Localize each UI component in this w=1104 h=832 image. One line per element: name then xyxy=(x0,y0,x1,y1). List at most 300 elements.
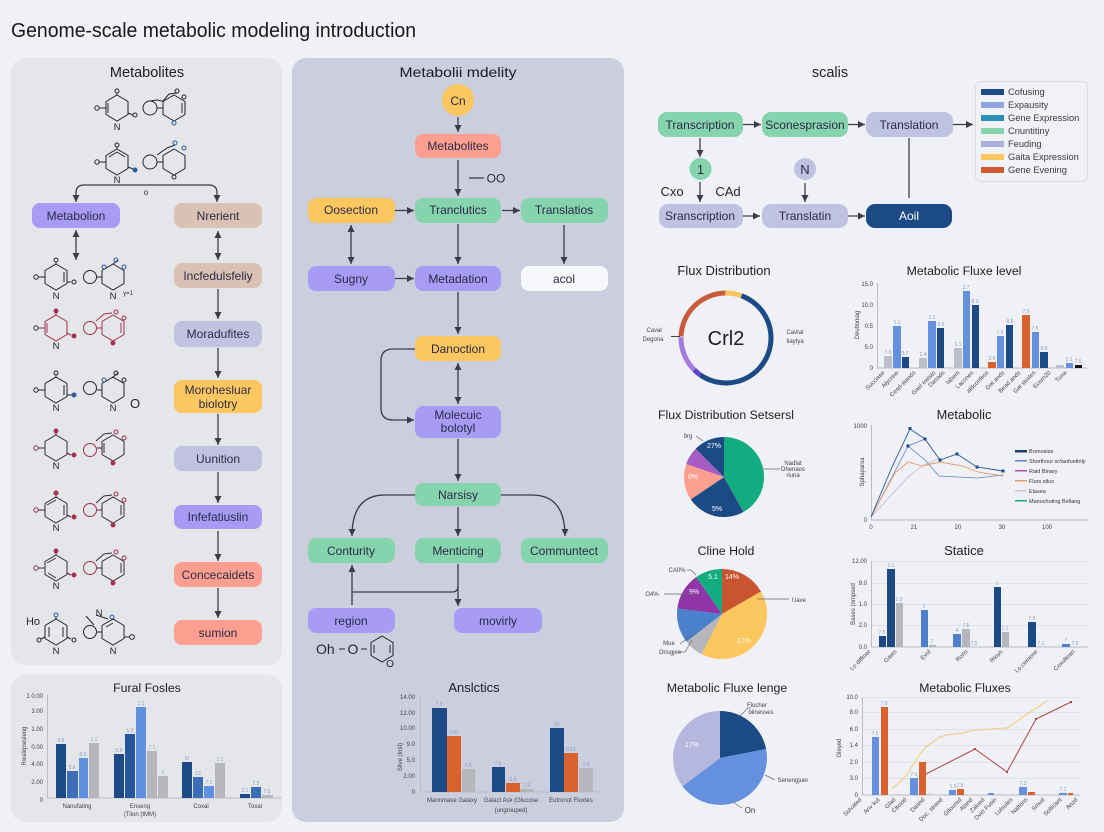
node: Translatin: Translatin xyxy=(779,209,831,223)
node: Conturity: Conturity xyxy=(327,544,375,558)
arrow xyxy=(699,182,701,202)
node: region: region xyxy=(334,614,368,628)
bar chart: analytics: Mannmase Galaxy xyxy=(427,798,477,804)
bar chart: statice: 1.0 xyxy=(859,602,868,608)
bar chart: 3.00 xyxy=(31,709,44,715)
arrow xyxy=(217,472,219,503)
bar chart: analytics: 9.0 xyxy=(407,742,416,748)
bar chart: 1.1 xyxy=(138,701,145,707)
bar chart: statice: 1.1 xyxy=(888,563,895,569)
bar chart: analytics: 0.9 xyxy=(510,777,517,783)
line chart: metabolic: 0 xyxy=(869,525,873,531)
combo chart: metabolic fluxes: Solvated xyxy=(843,797,863,818)
node: Oosection: Oosection xyxy=(324,203,378,217)
arrow xyxy=(457,160,459,196)
bar chart: metabolic fluxe level: 1.1 xyxy=(894,320,901,326)
bar chart: analytics: 7.3 xyxy=(436,702,443,708)
combo chart: metabolic fluxes: Cltoxid xyxy=(891,797,908,814)
heading: analytics chart: Anslctics xyxy=(448,680,500,695)
molecule row 5: N xyxy=(110,403,117,414)
bar chart: statice: 2.0 xyxy=(859,623,868,629)
bar chart: 5.5 xyxy=(116,748,123,754)
node: Morohesluar biolotry xyxy=(174,380,262,413)
node: Cn: Cn xyxy=(450,94,466,108)
connector xyxy=(908,138,910,198)
bar chart: metabolic fluxe level: aldconfess xyxy=(966,370,990,395)
pie chart: flux distribution setsersl: 0% xyxy=(688,474,698,481)
molecule row 3: y=1 xyxy=(123,291,134,297)
bar chart: metabolic fluxe level: 1.4 xyxy=(920,352,927,358)
combo chart: metabolic fluxes: Smud xyxy=(1031,797,1046,813)
bar chart: metabolic fluxe level: 7.5 xyxy=(997,330,1004,336)
combo chart: metabolic fluxes: 0 xyxy=(855,793,859,799)
bar chart: metabolic fluxe level: Bead ands xyxy=(998,370,1022,395)
arrow xyxy=(457,439,459,481)
molecule row 7: N xyxy=(53,523,60,534)
pie chart: flux distribution setsersl: 5% xyxy=(712,506,722,513)
bar chart: analytics: 51 xyxy=(554,722,560,728)
line chart: metabolic: Elasea xyxy=(1029,489,1047,495)
bar chart: metabolic fluxe level: 5.0 xyxy=(865,345,874,351)
bar chart: 4.00 xyxy=(31,762,44,768)
bar chart: analytics: 7.3 xyxy=(524,783,531,789)
bar chart: analytics: 7.3 xyxy=(583,762,590,768)
arrow xyxy=(395,210,414,212)
bar chart: metabolic fluxe level: 7.6 xyxy=(1075,359,1082,365)
combo chart: metabolic fluxes: Atand xyxy=(959,797,974,813)
arrow xyxy=(350,225,352,264)
node: Uunition xyxy=(174,446,262,471)
node: Morohesluar biolotry: Morohesluar xyxy=(185,383,251,397)
node: acol xyxy=(521,266,608,291)
line chart: metabolic: 21 xyxy=(911,525,918,531)
node: Concecaidets: Concecaidets xyxy=(182,568,254,582)
molecule row 4: N xyxy=(53,341,60,352)
line chart: metabolic: 1000 xyxy=(854,424,868,430)
legend: Cofusing xyxy=(1008,87,1045,97)
combo chart: metabolic fluxes: 7.6 xyxy=(881,701,888,707)
arrow xyxy=(457,224,459,264)
node: Narsisy: Narsisy xyxy=(438,488,478,502)
bar chart: analytics: 14.00 xyxy=(400,695,416,701)
legend xyxy=(976,82,1088,182)
node: Communtect xyxy=(521,538,608,563)
arrow xyxy=(217,531,219,561)
bar chart: statice: 1.9 xyxy=(896,597,903,603)
bar chart: metabolic fluxe level: 1.1 xyxy=(955,342,962,348)
bar chart: 5.5 xyxy=(80,752,87,758)
bar chart: metabolic fluxe level: Gat studes xyxy=(1013,370,1037,395)
node: movirly xyxy=(454,608,542,633)
bar chart: metabolic fluxe level: 3.1 xyxy=(1066,357,1073,363)
connector label: o xyxy=(144,188,149,197)
bar chart: 0 xyxy=(40,798,44,804)
bar chart: statice: 7.5 xyxy=(879,630,886,636)
arrow xyxy=(457,363,459,404)
node: Communtect: Communtect xyxy=(530,544,599,558)
molecule row 3 xyxy=(34,258,134,302)
node: Tranclutics xyxy=(415,198,501,223)
bar chart: 1 xyxy=(162,770,165,776)
curved arrow right xyxy=(501,495,565,536)
pie chart: metabolic fluxe lenge: 17% xyxy=(685,742,699,749)
molecule row 9: N xyxy=(110,646,117,657)
bar chart: metabolic fluxe level: Deutloniag xyxy=(855,311,861,339)
molecule row 4 xyxy=(34,309,126,352)
node: Narsisy xyxy=(415,483,501,506)
combo chart: metabolic fluxes: 1.4 xyxy=(850,743,859,749)
bar chart xyxy=(22,694,282,818)
arrow xyxy=(457,507,459,536)
bar chart: (Tiion (tMM) xyxy=(124,812,156,818)
line chart: metabolic: Manuchuting Bellang xyxy=(1029,499,1080,505)
bar chart: metabolic fluxe level: Lacones xyxy=(955,370,975,390)
node: sumion: sumion xyxy=(199,626,237,640)
bar chart: metabolic fluxe level: 3.8 xyxy=(989,356,996,362)
bar chart: metabolic fluxe level: 3.7 xyxy=(902,351,909,357)
arrow xyxy=(563,225,565,264)
molecule row 8: N xyxy=(53,581,60,592)
pie chart: cline hold: Onsgjee xyxy=(659,650,682,656)
bar chart: Enseng xyxy=(130,804,150,810)
node: Incfedulsfeliy xyxy=(174,263,262,288)
bar chart: metabolic fluxe level: Gael ewisto xyxy=(911,370,938,397)
combo chart: metabolic fluxes: Anzd xyxy=(1065,797,1079,811)
molecule row 5: N xyxy=(53,403,60,414)
bar chart: 7.5 xyxy=(264,789,271,795)
molecule row 8 xyxy=(34,549,126,592)
node: N xyxy=(794,158,816,180)
pie chart: metabolic fluxe lenge: Senengjuer xyxy=(778,778,808,784)
combo chart: metabolic fluxes: Solticant xyxy=(1043,797,1064,818)
pie chart: cline hold xyxy=(645,544,807,659)
combo chart: metabolic fluxes: 8.0 xyxy=(850,710,859,716)
heading: Fural Fosles xyxy=(113,681,181,695)
bar chart: metabolic fluxe level: Dasads xyxy=(928,370,946,389)
bar chart: Coxal xyxy=(193,804,209,810)
molecule row 9: Ho xyxy=(26,616,40,628)
bar chart: statice: 7.1 xyxy=(1038,641,1045,647)
bar chart: 5.6 xyxy=(58,738,65,744)
bar chart: 7.5 xyxy=(253,781,260,787)
arrow xyxy=(457,117,459,132)
node: Translatin xyxy=(762,204,848,228)
branching connector xyxy=(76,185,217,202)
bar chart: metabolic fluxe level: 8.8 xyxy=(1007,319,1014,325)
bar chart: metabolic fluxe level: 15.0 xyxy=(861,282,874,288)
node: acol: acol xyxy=(553,272,575,286)
arrow xyxy=(75,230,77,260)
pie chart: cline hold: 9% xyxy=(689,589,699,596)
node: Infefatiuslin: Infefatiuslin xyxy=(188,510,248,524)
molecule row 2: N xyxy=(114,175,121,186)
bar chart: 1.1 xyxy=(217,757,224,763)
bar chart: statice: Lo.cemene xyxy=(1014,649,1040,674)
label: CAd: CAd xyxy=(715,184,741,199)
molecule row 5 xyxy=(34,371,140,414)
bar chart: analytics: 5.0 xyxy=(407,758,416,764)
node: movirly: movirly xyxy=(479,614,517,628)
heading: Statice xyxy=(944,543,984,558)
bar chart: metabolic fluxe level: 8.3 xyxy=(972,299,979,305)
pie chart: metabolic fluxe lenge: bilnesses xyxy=(748,710,774,716)
pie chart: metabolic fluxe lenge: Flocher xyxy=(747,703,767,709)
molecule: On-O-ring: O xyxy=(348,641,359,657)
line chart: metabolic xyxy=(854,407,1089,531)
node: Metabolites: Metabolites xyxy=(427,139,489,153)
legend: Gene Expression xyxy=(1008,113,1079,123)
node: Translation xyxy=(866,112,953,137)
pie chart: cline hold: Mue xyxy=(663,641,675,647)
donut chart: flux distribution: Iiaytya xyxy=(786,339,804,345)
node: Moradufites: Moradufites xyxy=(187,327,249,341)
node: N: N xyxy=(800,162,810,177)
bar chart: statice: 4 xyxy=(956,628,959,634)
feedback connector xyxy=(351,565,353,605)
combo chart: metabolic fluxes xyxy=(837,681,1080,823)
node: Sugny xyxy=(308,266,395,291)
molecule row 9: N xyxy=(53,646,60,657)
node: Metadation: Metadation xyxy=(428,272,488,286)
bar chart: statice: 1 xyxy=(923,604,926,610)
molecule row 1: N xyxy=(114,122,121,133)
legend: Feuding xyxy=(1008,139,1042,149)
molecule row 3: N xyxy=(110,291,117,302)
node: region xyxy=(308,608,395,633)
line chart: metabolic: Brenosize xyxy=(1029,449,1053,455)
bar chart: metabolic fluxe level: Get ands xyxy=(985,370,1006,392)
bar chart: Rwaliqoesleng xyxy=(22,726,28,766)
line chart: metabolic: Raid Binary xyxy=(1029,469,1058,475)
arrow xyxy=(457,292,459,334)
molecule row 5: O xyxy=(130,396,140,411)
node: Cn xyxy=(442,84,474,116)
node: Morohesluar biolotry: biolotry xyxy=(199,397,237,411)
bar chart: metabolic fluxe level: 3.7 xyxy=(963,285,970,291)
node: Sconesprasion: Sconesprasion xyxy=(765,118,845,132)
pie chart: flux distribution setsersl: Nadlat xyxy=(784,461,802,467)
node: Menticing xyxy=(415,538,501,563)
node: Translation: Translation xyxy=(880,118,938,132)
molecule row 7 xyxy=(34,491,126,534)
heading: Flux Distribution xyxy=(677,263,771,278)
molecule: On-O-ring: Oh xyxy=(316,641,335,657)
bar chart: analytics: 0.51 xyxy=(566,747,576,753)
panel: metabolic modelity flowchart xyxy=(292,58,624,822)
bar chart: statice: Rons xyxy=(955,649,969,663)
node: Metadation xyxy=(415,266,501,291)
line chart: metabolic: Shorthour sr/iaofueltnly xyxy=(1029,459,1086,465)
node: Metabolion: Metabolion xyxy=(47,209,105,223)
bar chart: statice: 7.6 xyxy=(1029,616,1036,622)
molecule row 1 xyxy=(95,89,186,133)
node: Moradufites xyxy=(174,321,262,347)
bar chart: metabolic fluxe level: 7.5 xyxy=(1023,309,1030,315)
arrow xyxy=(217,588,219,618)
bar chart: statice: 7 xyxy=(931,639,934,645)
arrow xyxy=(953,124,973,126)
bar chart: analytics: Silve (Inst) xyxy=(398,743,404,771)
node: Transcription xyxy=(658,112,743,137)
bar chart: Toxal xyxy=(248,804,262,810)
bar chart: analytics: 12.00 xyxy=(400,711,416,717)
horizontal connector xyxy=(352,586,458,592)
node: Oosection xyxy=(308,198,395,223)
molecule: On-O-ring xyxy=(316,636,394,670)
arrow xyxy=(743,215,760,217)
bar chart: statice: Lo diffmer xyxy=(849,649,872,672)
label: Cxo: Cxo xyxy=(660,184,684,199)
line chart: metabolic: 20 xyxy=(955,525,962,531)
donut chart: flux distribution: Crl2 xyxy=(708,328,744,350)
combo chart: metabolic fluxes: 7.5 xyxy=(911,772,918,778)
bar chart: metabolic fluxe level: 6.6 xyxy=(938,322,945,328)
combo chart: metabolic fluxes: Doc. strand xyxy=(918,797,944,823)
bar chart: analytics xyxy=(398,695,602,814)
pie chart: metabolic fluxe lenge: On xyxy=(745,806,755,815)
bar chart: 2.00 xyxy=(31,780,44,786)
combo chart: metabolic fluxes: 7.3 xyxy=(1020,781,1027,787)
donut chart: flux distribution xyxy=(642,263,804,402)
panel: bar chart bottom left xyxy=(11,675,282,822)
node: Uunition: Uunition xyxy=(196,452,240,466)
bar chart: analytics: 7.5 xyxy=(465,763,472,769)
bar chart: statice: 7.5 xyxy=(1072,641,1079,647)
bar chart: metabolic fluxe level: Tuna xyxy=(1055,370,1069,384)
combo chart: metabolic fluxes: 6.0 xyxy=(850,727,859,733)
bar chart: analytics: 2.00 xyxy=(403,774,416,780)
line chart: metabolic: Sphaparsa xyxy=(860,457,866,487)
combo chart: metabolic fluxes: Anv kut xyxy=(863,797,882,816)
bar chart: metabolic fluxe level: 1.1 xyxy=(929,315,936,321)
node: sumion xyxy=(174,620,262,645)
node: 1: 1 xyxy=(697,162,704,177)
bar chart: analytics: Eutronot Fluxtes xyxy=(549,798,593,804)
node: Infefatiuslin xyxy=(174,505,262,529)
pie chart: cline hold: CA0% xyxy=(668,568,686,574)
node: Sugny: Sugny xyxy=(334,272,368,286)
heading: Metabolic xyxy=(937,407,992,422)
node: 1 xyxy=(690,158,712,180)
bar chart: analytics: 0 xyxy=(412,790,416,796)
node: Sranscription: Sranscription xyxy=(665,209,735,223)
combo chart: metabolic fluxes: 7.1 xyxy=(1060,787,1067,793)
node: Aoil xyxy=(866,204,952,228)
node: Aoil: Aoil xyxy=(899,209,919,223)
bar chart: 1.2 xyxy=(127,728,134,734)
node: Sconesprasion xyxy=(762,112,848,137)
node: Metabolites xyxy=(415,134,501,158)
legend: Expausity xyxy=(1008,100,1049,110)
line chart: metabolic: 0 xyxy=(864,518,868,524)
bar chart: Nanufating xyxy=(62,804,92,810)
node: Concecaidets xyxy=(174,562,262,587)
pie chart: flux distribution setsersl: 27% xyxy=(707,443,721,450)
node: Nrerient xyxy=(174,203,262,228)
node: Menticing: Menticing xyxy=(432,544,484,558)
molecule: On-O-ring: O xyxy=(386,659,394,670)
bar chart: 0.00 xyxy=(31,745,44,751)
bar chart: statice: 1.1 xyxy=(1002,626,1009,632)
combo chart: metabolic fluxes: Gltoured xyxy=(943,797,963,818)
node: Translatios: Translatios xyxy=(535,203,593,217)
node: Tranclutics: Tranclutics xyxy=(429,203,487,217)
combo chart: metabolic fluxes: Lulsutes xyxy=(994,797,1014,817)
node: Incfedulsfeliy: Incfedulsfeliy xyxy=(183,269,253,283)
node: Danoction: Danoction xyxy=(431,342,485,356)
heading: Flux Distribution Setsersl xyxy=(658,408,794,422)
pie chart: flux distribution setsersl: Dhenaos xyxy=(781,467,805,473)
arrow xyxy=(804,183,806,202)
node: Molecuic bolotyl: Molecuic xyxy=(434,408,482,422)
bar chart: statice: 1 xyxy=(996,581,999,587)
bar chart: metabolic fluxe level: 0 xyxy=(870,366,874,372)
arrow xyxy=(502,210,520,212)
bar chart: 3.1 xyxy=(242,788,249,794)
combo chart: metabolic fluxes: Glad xyxy=(884,797,897,810)
panel: metabolites xyxy=(11,58,282,665)
arrow xyxy=(848,215,865,217)
combo chart: metabolic fluxes: 7.5 xyxy=(957,783,964,789)
arrow xyxy=(395,278,414,280)
combo chart: metabolic fluxes: 3.0 xyxy=(850,776,859,782)
donut chart: flux distribution: Cavtal xyxy=(786,330,804,336)
node: Nrerient: Nrerient xyxy=(197,209,240,223)
bar chart: 7.1 xyxy=(149,745,156,751)
combo chart: metabolic fluxes: Daand xyxy=(910,797,926,814)
node: Molecuic bolotyl xyxy=(415,406,501,438)
arrow xyxy=(848,124,865,126)
bar chart: metabolic fluxe level: Ecorn20 xyxy=(1032,370,1053,390)
pie chart: flux distribution setsersl xyxy=(658,408,805,517)
heading: Metabolic Fluxe level xyxy=(907,264,1021,278)
combo chart: metabolic fluxes: 2.0 xyxy=(850,760,859,766)
pie chart: metabolic fluxe lenge xyxy=(667,681,808,815)
title: Genome-scale metabolic modeling introduction xyxy=(11,20,416,42)
arrow xyxy=(699,138,701,157)
heading: metabolites: Metabolites xyxy=(110,65,184,81)
node: Molecuic bolotyl: bolotyl xyxy=(441,421,475,435)
loop arrow xyxy=(381,349,415,420)
bar chart: metabolic fluxe level: 7.5 xyxy=(1032,326,1039,332)
node: Danoction xyxy=(415,336,501,361)
bar chart: analytics: 7.0 xyxy=(495,761,502,767)
pie chart: cline hold: O4% xyxy=(645,592,659,598)
combo chart: metabolic fluxes: 7.5 xyxy=(872,731,879,737)
legend: Gene Evening xyxy=(1008,165,1067,175)
heading: Cline Hold xyxy=(698,544,755,558)
bar chart: statice: 0.0 xyxy=(859,645,868,651)
molecule row 9 xyxy=(26,608,134,657)
bar chart: metabolic fluxe level: Succiase xyxy=(865,370,887,392)
arrow xyxy=(217,289,219,319)
bar chart: 1 0.00 xyxy=(26,694,44,700)
line chart: metabolic: Flurs stlus xyxy=(1029,479,1054,485)
bar chart: statice: Bases (nmpsed xyxy=(851,583,857,625)
bar chart: metabolic fluxe level: 8.8 xyxy=(1041,346,1048,352)
arrow xyxy=(217,414,219,445)
pie chart: cline hold: 5.1 xyxy=(708,574,718,581)
legend: Gaita Expression xyxy=(1008,152,1079,162)
molecule row 6 xyxy=(34,429,126,472)
annotation: OO xyxy=(469,172,505,186)
bar chart: metabolic fluxe level: 7.5 xyxy=(885,350,892,356)
heading: Metabolic Fluxe lenge xyxy=(667,681,787,695)
bar chart: 1.1 xyxy=(91,737,98,743)
annotation: OO: OO xyxy=(487,172,505,186)
combo chart: metabolic fluxes: Zalued xyxy=(969,797,986,814)
bar chart: metabolic fluxe level: Iabers xyxy=(945,370,961,386)
